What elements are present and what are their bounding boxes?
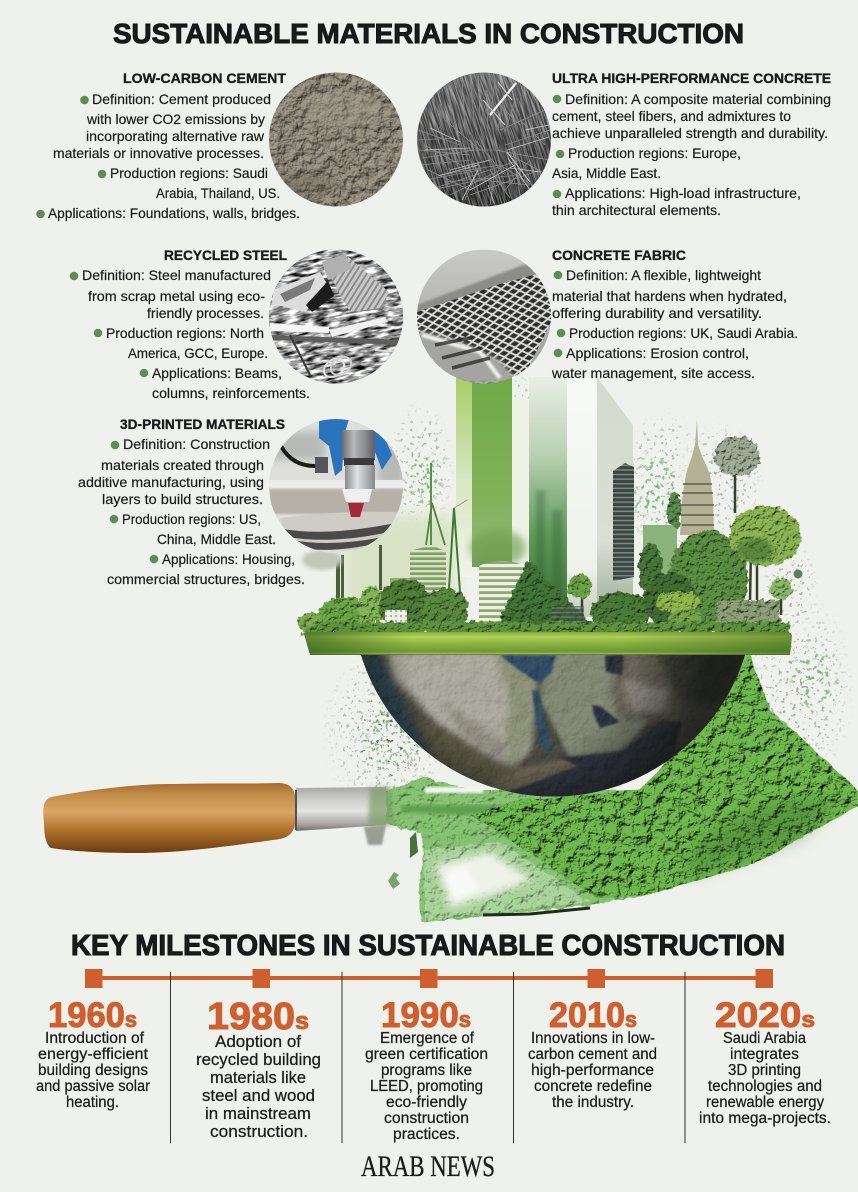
heading: LOW-CARBON CEMENT xyxy=(123,71,287,86)
text block: columns, reinforcements. xyxy=(152,385,310,401)
heading: ULTRA HIGH-PERFORMANCE CONCRETE xyxy=(552,71,831,86)
milestone: 2020s: 3D printing xyxy=(728,1062,801,1079)
panel: recycled steel xyxy=(70,250,403,400)
image: cement powder xyxy=(265,72,403,207)
text block: Production regions: UK, Saudi Arabia. xyxy=(569,325,798,341)
text block: offering durability and versatility. xyxy=(552,305,762,321)
image: steel fibers xyxy=(417,72,551,206)
milestone: 2010s xyxy=(528,996,657,1111)
text block: America, GCC, Europe. xyxy=(128,345,268,361)
milestone: 1990s: LEED, promoting xyxy=(370,1078,483,1095)
text block: Definition: A composite material combining xyxy=(565,91,831,107)
milestone: 2010s: Innovations in low- xyxy=(531,1030,655,1047)
platform disc xyxy=(304,632,792,655)
text block: materials or innovative processes. xyxy=(53,145,264,161)
text block: achieve unparalleled strength and durability. xyxy=(552,125,828,141)
text block: Arabia, Thailand, US. xyxy=(156,185,280,201)
text block: incorporating alternative raw xyxy=(86,128,265,144)
milestone: 2010s: 2010s xyxy=(549,996,637,1035)
text block: Production regions: North xyxy=(106,325,264,341)
milestone: 2020s: Saudi Arabia xyxy=(723,1030,806,1047)
text block: from scrap metal using eco- xyxy=(88,288,265,304)
text block xyxy=(78,436,305,587)
text block: material that hardens when hydrated, xyxy=(552,288,787,304)
milestone: 1960s: Introduction of xyxy=(45,1030,145,1047)
city: background buildings xyxy=(302,377,714,632)
text block xyxy=(70,267,310,401)
heading: key milestones: KEY MILESTONES IN SUSTAINABLE CONSTRUCTION xyxy=(71,930,785,962)
milestone: 2020s xyxy=(699,996,831,1127)
milestone: 1960s: 1960s xyxy=(48,996,137,1035)
heading: CONCRETE FABRIC xyxy=(552,248,686,263)
title: SUSTAINABLE MATERIALS IN CONSTRUCTION xyxy=(113,18,744,49)
text block: Production regions: Europe, xyxy=(568,145,741,161)
text block: commercial structures, bridges. xyxy=(107,571,305,587)
milestone: 1980s: materials like xyxy=(210,1069,306,1087)
milestone: 1980s: Adoption of xyxy=(215,1033,301,1051)
text block: Applications: Beams, xyxy=(152,365,282,381)
milestone: 2020s: technologies and xyxy=(708,1078,822,1095)
milestone: 1960s: energy-efficient xyxy=(38,1046,149,1063)
milestone: 1990s: practices. xyxy=(393,1126,460,1143)
milestone: 2010s: high-performance xyxy=(531,1062,654,1079)
text block: Definition: Steel manufactured xyxy=(82,267,271,283)
milestone: 2020s: into mega-projects. xyxy=(699,1110,831,1127)
milestone: 1990s: 1990s xyxy=(381,996,471,1035)
panel: ultra high-performance concrete xyxy=(417,72,831,216)
text block xyxy=(551,267,798,381)
milestone: 1980s: in mainstream xyxy=(205,1105,311,1123)
text block: Production regions: Saudi xyxy=(110,165,268,181)
milestone: 1980s: recycled building xyxy=(196,1051,321,1069)
milestone: 2020s: 2020 s xyxy=(715,996,815,1035)
milestone: 1990s xyxy=(365,996,488,1143)
milestone: 1980s xyxy=(196,996,321,1141)
image: scrap steel xyxy=(269,250,403,384)
text block: layers to build structures. xyxy=(102,491,263,507)
city: trees and greenery xyxy=(297,436,801,634)
text block: additive manufacturing, using xyxy=(78,474,264,490)
text block: Production regions: US, xyxy=(122,511,261,527)
illustration: green city on globe with trowel xyxy=(43,370,858,922)
milestone: 1980s: construction. xyxy=(210,1123,308,1141)
milestone: 2020s: renewable energy xyxy=(706,1094,824,1111)
timeline xyxy=(36,969,831,1143)
milestone: 2020s: integrates xyxy=(730,1046,799,1063)
text block: cement, steel fibers, and admixtures to xyxy=(552,108,791,124)
milestone: 1960s: building designs xyxy=(38,1062,148,1079)
milestone: 1960s: heating. xyxy=(66,1094,119,1111)
text block: Applications: Housing, xyxy=(162,551,295,567)
text block: thin architectural elements. xyxy=(552,202,721,218)
globe xyxy=(361,655,745,796)
text block: Applications: Erosion control, xyxy=(566,345,749,361)
milestone: 2010s: concrete redefine xyxy=(534,1078,652,1095)
image: 3D printer nozzle xyxy=(269,416,404,554)
text block: Definition: A flexible, lightweight xyxy=(566,267,761,283)
milestone: 1960s: and passive solar xyxy=(36,1078,150,1095)
trowel handle xyxy=(43,783,395,853)
panel: concrete fabric xyxy=(417,248,798,384)
text block: Definition: Construction xyxy=(123,436,270,452)
milestone: 1980s: 1980s xyxy=(207,996,309,1038)
logo: Arab News: ARAB NEWS xyxy=(361,1150,495,1183)
text block: friendly processes. xyxy=(147,305,264,321)
text block: Asia, Middle East. xyxy=(552,165,661,181)
text block: materials created through xyxy=(101,457,264,473)
heading: 3D-PRINTED MATERIALS xyxy=(120,417,285,432)
paint splatter xyxy=(280,370,858,889)
text block: water management, site access. xyxy=(551,365,755,381)
heading: RECYCLED STEEL xyxy=(164,248,287,263)
text block: Definition: Cement produced xyxy=(92,91,271,107)
milestone: 1990s: construction xyxy=(384,1110,469,1127)
panel: 3D-printed materials xyxy=(78,416,404,587)
timeline axis and markers xyxy=(85,969,773,988)
panel: low-carbon cement xyxy=(36,71,403,221)
milestone: 1990s: programs like xyxy=(381,1062,472,1079)
text block: China, Middle East. xyxy=(157,531,276,547)
milestone: 1990s: green certification xyxy=(365,1046,488,1063)
text block: with lower CO2 emissions by xyxy=(86,111,265,127)
milestone: 1990s: Emergence of xyxy=(380,1030,475,1047)
text block: Applications: Foundations, walls, bridges. xyxy=(48,205,300,221)
milestone: 1960s xyxy=(36,996,150,1111)
milestone: 2010s: carbon cement and xyxy=(528,1046,657,1063)
milestone: 1990s: eco-friendly xyxy=(386,1094,467,1111)
trowel blade xyxy=(364,650,858,922)
text block xyxy=(552,91,831,218)
text block xyxy=(36,91,300,221)
milestone: 1980s: steel and wood xyxy=(202,1087,315,1105)
text block: Applications: High-load infrastructure, xyxy=(565,185,801,201)
milestone: 2010s: the industry. xyxy=(552,1094,634,1111)
image: concrete fabric mesh xyxy=(417,249,552,384)
